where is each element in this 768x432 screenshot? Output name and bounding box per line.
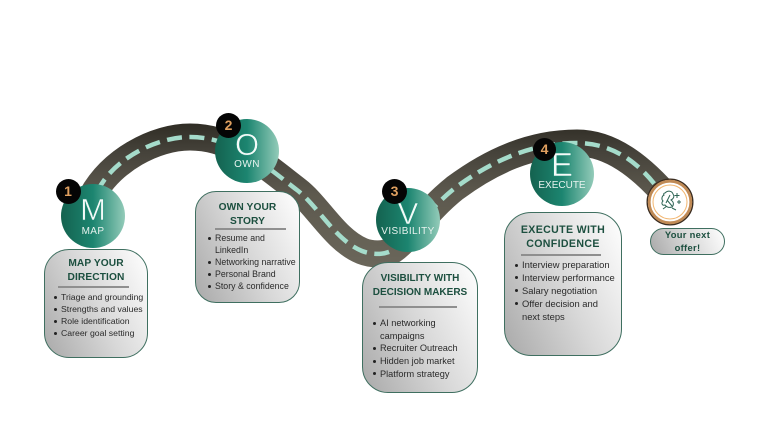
label: Your next [665, 229, 710, 240]
number badge 2: 2 [225, 117, 232, 133]
label [665, 229, 710, 252]
circle: E execute: EXECUTE [538, 180, 586, 191]
bullet list: Salary negotiation [522, 285, 597, 296]
bullet list: Resume and [215, 233, 265, 243]
heading: MAP YOUR [68, 258, 124, 269]
circle: V visibility: VISIBILITY [381, 226, 435, 237]
circle: O own: O [235, 127, 259, 162]
number badge 1: 1 [64, 182, 72, 198]
heading [521, 224, 605, 250]
circle: O own: OWN [234, 159, 260, 170]
circle: E execute [530, 142, 594, 206]
number badge 4 [533, 138, 556, 161]
number badge 3: 3 [391, 183, 398, 199]
heading: DECISION MAKERS [373, 286, 467, 298]
card: your next offer [650, 228, 725, 255]
number badge 1 [56, 178, 80, 204]
heading [68, 258, 124, 282]
heading: DIRECTION [68, 272, 124, 282]
number badge 4: 4 [541, 141, 548, 157]
bullet list: campaigns [380, 331, 424, 341]
bullet list [515, 259, 615, 322]
bullet list: Role identification [61, 316, 130, 326]
card: visibility with decision makers [362, 262, 478, 393]
heading: EXECUTE WITH [521, 224, 605, 236]
bullet list: Platform strategy [380, 369, 449, 379]
circle: E execute: E [551, 146, 573, 183]
bullet list: Strengths and values [61, 304, 143, 314]
heading [219, 202, 276, 226]
number badge 3 [382, 179, 407, 204]
bullet list: Interview preparation [522, 259, 610, 270]
heading: OWN YOUR [219, 202, 276, 213]
card: execute with confidence [504, 212, 622, 356]
bullet list: Personal Brand [215, 269, 276, 279]
bullet list: Interview performance [522, 272, 615, 283]
circle: O own [215, 119, 279, 183]
heading: CONFIDENCE [526, 238, 600, 250]
bullet list: Hidden job market [380, 356, 455, 366]
bullet list: Recruiter Outreach [380, 343, 458, 353]
card: map your direction [44, 249, 148, 358]
circle: V visibility [376, 188, 440, 252]
card: own your story [195, 191, 300, 303]
bullet list: AI networking [380, 318, 436, 328]
number badge 2 [216, 113, 241, 138]
bullet list [54, 292, 143, 338]
bullet list: LinkedIn [215, 245, 248, 255]
circle: M map [61, 184, 125, 248]
bullet list: Networking narrative [215, 257, 296, 267]
bullet list: Career goal setting [61, 328, 134, 338]
circle: M map: MAP [82, 226, 104, 237]
bullet list: next steps [522, 311, 565, 322]
bullet list: Offer decision and [522, 298, 598, 309]
circle: M map: M [80, 192, 106, 227]
label: offer! [675, 242, 700, 252]
heading: VISIBILITY WITH [381, 273, 459, 284]
bullet list [208, 233, 296, 291]
heading [373, 273, 467, 298]
circle: V visibility: V [398, 196, 418, 231]
bullet list [373, 318, 458, 379]
bullet list: Triage and grounding [61, 292, 143, 302]
icon: offer destination medallion [646, 178, 694, 226]
bullet list: Story & confidence [215, 281, 289, 291]
heading: STORY [230, 216, 265, 226]
